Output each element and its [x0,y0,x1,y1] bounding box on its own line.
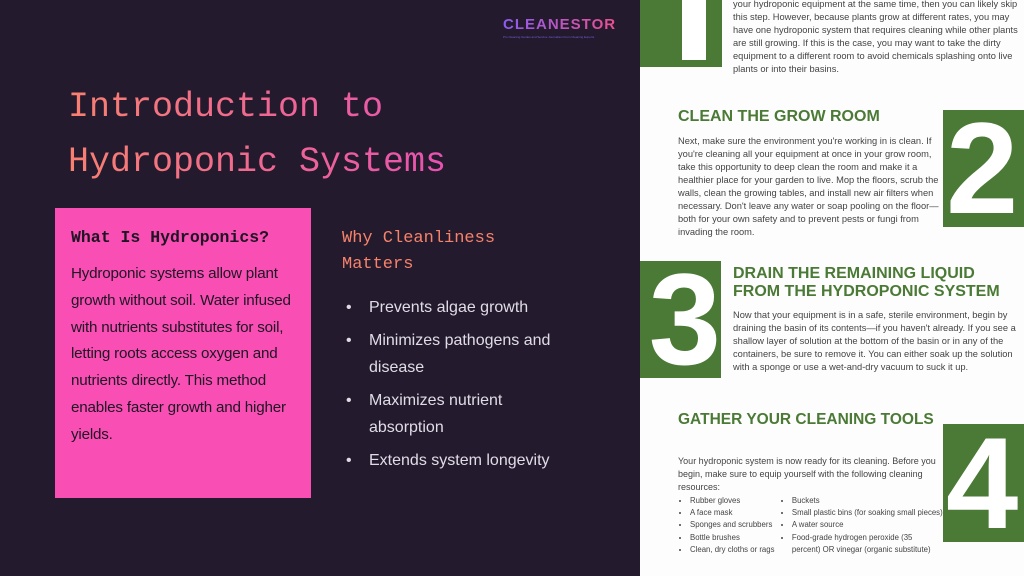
text step 1: your hydroponic equipment at the same time, then you can likely skip this step. However, because plants grow at different rates, you may have one hydroponic system that requires cleaning while other plants are still growing. If this is the case, you may want to take the dirty equipment to a different room to avoid chemicals splashing onto live plants or into their basins. [733,0,1018,74]
bullet list: • [346,332,352,349]
text step 4: Bottle brushes [690,533,740,542]
heading step 3: FROM THE HYDROPONIC SYSTEM [733,283,1000,300]
text step 4: A water source [792,520,843,529]
text step 4: A face mask [690,508,732,517]
logo: Pro Cleaning Guides and Service Journalism From Cleaning Experts [503,35,594,39]
text step 4: Your hydroponic system is now ready for its cleaning. Before you begin, make sure to equip yourself with the following cleaning resources: [678,456,936,492]
panel: cleaning steps [640,0,1024,576]
heading: why cleanliness matters: Matters [342,255,413,274]
heading: What Is Hydroponics? [71,228,269,247]
heading step 4: GATHER YOUR CLEANING TOOLS [678,411,934,428]
text step 4: Buckets [792,496,820,505]
bullet list: Prevents algae growth [369,299,528,316]
title: Introduction to [68,87,383,127]
icon: number 1 [640,0,722,67]
text step 4: Clean, dry cloths or rags [690,545,775,554]
text step 3: Now that your equipment is in a safe, sterile environment, begin by draining the basin of its contents—if you haven't already. If you see a shallow layer of solution at the bottom of the basin or in any of the containers, be sure to remove it. You can either soak up the solution with a sponge or use a wet-and-dry vacuum to suck it up. [733,310,1016,372]
text step 4 [678,456,943,554]
logo: CLEANESTOR [503,16,616,33]
bullet list: • [346,299,352,316]
panel: what is hydroponics [55,208,311,498]
text step 4: Small plastic bins (for soaking small pieces) [792,508,943,517]
text step 4: Sponges and scrubbers [690,520,772,529]
heading: why cleanliness matters: Why Cleanliness [342,229,495,248]
heading step 3 [733,265,1000,300]
bullet list: • [346,452,352,469]
bullet list: Minimizes pathogens and disease [369,332,550,376]
bullet list: Extends system longevity [369,452,550,469]
bullet list: • [346,392,352,409]
heading: why cleanliness matters [342,229,495,274]
title [68,80,468,190]
text block: Hydroponic systems allow plant growth without soil. Water infused with nutrients substitutes for soil, letting roots access oxygen and nutrients directly. This method enables faster growth and higher yields. [71,265,291,443]
heading step 2: CLEAN THE GROW ROOM [678,108,880,125]
bullet list [346,299,550,469]
text step 2: Next, make sure the environment you're working in is clean. If you're cleaning all your equipment at once in your grow room, take this opportunity to deep clean the room and make it a healthier place for your garden to live. Mop the floors, scrub the walls, clean the growing tables, and install new air filters when necessary. Don't leave any water or soap pooling on the floor—both for your own safety and to prevent pests or fungi from invading the room. [678,136,939,237]
heading step 3: DRAIN THE REMAINING LIQUID [733,265,975,282]
title: Hydroponic Systems [68,142,446,182]
text step 4: Food-grade hydrogen peroxide (35 percent) OR vinegar (organic substitute) [792,533,931,554]
bullet list: Maximizes nutrient absorption [369,392,502,436]
text step 4: Rubber gloves [690,496,740,505]
